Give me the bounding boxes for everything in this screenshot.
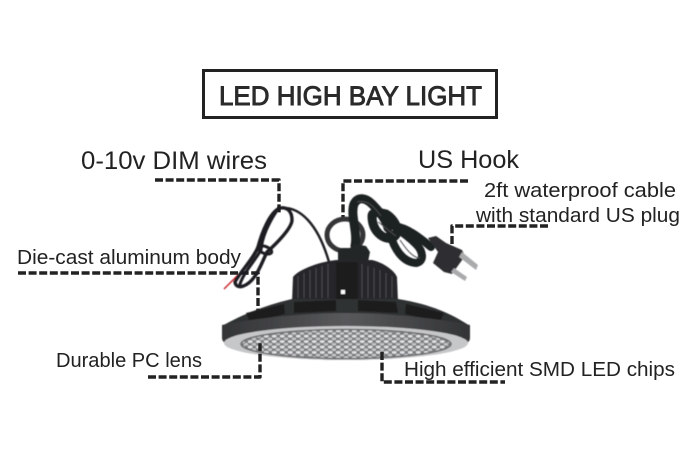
silver lens ring — [224, 326, 468, 360]
cable gland and top of housing — [332, 244, 372, 268]
finned housing — [292, 260, 398, 302]
leader: SMD LED chips — [382, 352, 505, 382]
label: 0-10v DIM wires: 0-10v DIM wires — [81, 147, 267, 175]
title: LED HIGH BAY LIGHT — [219, 81, 482, 111]
central channel with status light — [336, 262, 358, 302]
US plug — [428, 236, 478, 281]
leader: waterproof cable — [452, 226, 548, 263]
wires: DIM cable loops — [235, 208, 329, 287]
label: US Hook: US Hook — [418, 146, 519, 174]
hook ring — [327, 219, 363, 251]
leader: PC lens — [148, 343, 260, 377]
label: SMD LED chips: High efficient SMD LED chips — [404, 359, 675, 381]
leader: DIM wires — [155, 180, 279, 213]
rim — [222, 313, 470, 360]
cable coil highlights — [357, 201, 420, 258]
leader: US hook — [343, 181, 468, 218]
leader: die-cast body — [18, 273, 258, 313]
red wire tips — [224, 273, 240, 289]
PC lens with LED chips — [241, 330, 451, 358]
label: waterproof cable: with standard US plug — [475, 205, 680, 227]
label: die-cast body: Die-cast aluminum body — [17, 247, 241, 269]
label: PC lens: Durable PC lens — [56, 350, 202, 372]
body shoulder — [222, 299, 470, 336]
title — [204, 70, 496, 118]
label: waterproof cable: 2ft waterproof cable — [484, 180, 676, 202]
light fixture — [222, 199, 478, 360]
waterproof cable coil — [353, 199, 431, 263]
